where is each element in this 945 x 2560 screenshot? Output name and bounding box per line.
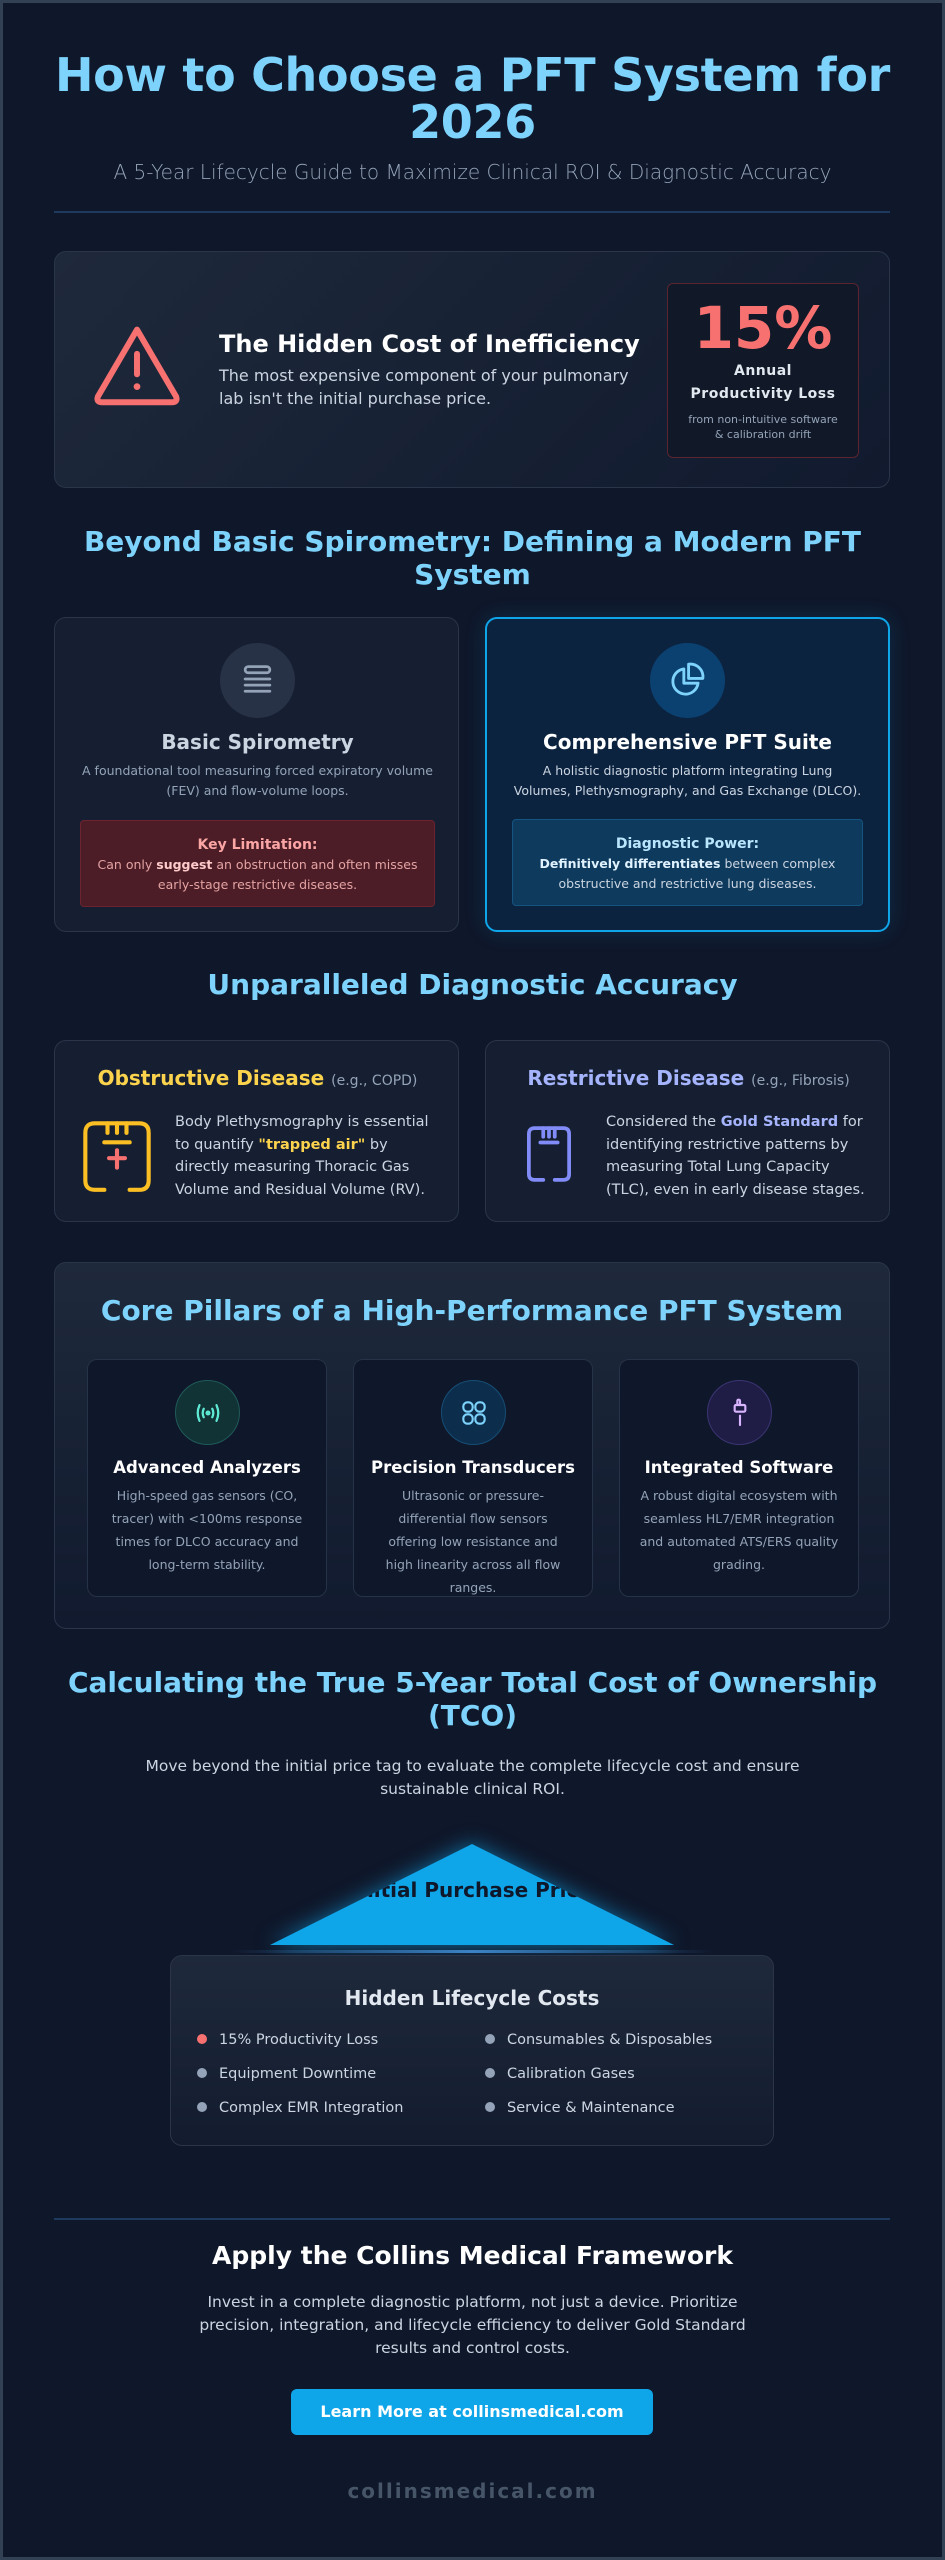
heading: Restrictive Disease (e.g., Fibrosis) <box>527 1066 850 1090</box>
box: hidden lifecycle costs: Hidden Lifecycle Costs <box>345 1986 599 2010</box>
desc: A holistic diagnostic platform integrating Lung <box>543 763 832 778</box>
panel: restrictive <box>485 1040 890 1222</box>
card: analyzers <box>87 1359 327 1597</box>
box: hidden lifecycle costs: Equipment Downtime <box>219 2066 376 2082</box>
icon: warning <box>94 326 180 406</box>
title: Integrated Software <box>645 1458 833 1477</box>
box: hidden lifecycle costs: Complex EMR Integration <box>219 2100 403 2116</box>
card: transducers <box>353 1359 593 1597</box>
stat box: 15% <box>694 294 832 362</box>
icon: device <box>527 1126 571 1182</box>
button: Learn More at collinsmedical.com <box>320 2402 624 2421</box>
icon: grid <box>441 1380 506 1445</box>
subtitle: A 5-Year Lifecycle Guide to Maximize Clinical ROI & Diagnostic Accuracy <box>114 160 831 184</box>
panel: basic spirometry <box>54 617 459 932</box>
callout: limitation: Key Limitation: <box>197 837 318 853</box>
stat box: & calibration drift <box>715 428 811 441</box>
icon: list <box>220 643 295 718</box>
icon: pie <box>650 643 725 718</box>
stat box: Annual <box>734 363 792 379</box>
icon: signal <box>175 1380 240 1445</box>
title: Basic Spirometry <box>161 730 354 754</box>
text: TCO intro: Move beyond the initial price tag to evaluate the complete lifecycle cost and ensure sustainable clinical ROI. <box>145 1757 800 1798</box>
callout: diagnostic power: Diagnostic Power: <box>616 836 759 852</box>
heading: accuracy: Unparalleled Diagnostic Accuracy <box>207 968 738 1001</box>
panel: comprehensive suite <box>485 617 890 932</box>
callout: diagnostic power: obstructive and restrictive lung diseases. <box>559 876 816 891</box>
triangle: initial purchase price: Initial Purchase Price <box>352 1878 592 1902</box>
box: hidden lifecycle costs: Consumables & Disposables <box>507 2032 712 2048</box>
button <box>291 2389 653 2435</box>
callout: diagnostic power: Definitively differentiates between complex <box>540 856 835 871</box>
heading: Core Pillars of a High-Performance PFT System <box>101 1294 843 1327</box>
box: hidden lifecycle costs <box>170 1955 774 2146</box>
callout: limitation <box>80 820 435 907</box>
stat box <box>667 283 859 458</box>
desc: Volumes, Plethysmography, and Gas Exchange (DLCO). <box>514 783 861 798</box>
title: Comprehensive PFT Suite <box>543 730 832 754</box>
text: Ultrasonic or pressure-differential flow sensors offering low resistance and high linearity across all flow ranges. <box>386 1488 560 1595</box>
title: Precision Transducers <box>371 1458 575 1477</box>
callout: diagnostic power <box>512 819 863 906</box>
panel: core pillars <box>54 1262 890 1629</box>
chart: cost iceberg <box>170 1834 774 2146</box>
callout: limitation: Can only suggest an obstruction and often misses <box>98 857 417 872</box>
panel: hidden cost <box>54 251 890 488</box>
title: How to Choose a PFT System for 2026 <box>55 48 890 149</box>
desc <box>514 763 861 798</box>
heading: apply framework: Apply the Collins Medical Framework <box>212 2241 733 2270</box>
text: Considered the Gold Standard for identifying restrictive patterns by measuring Total Lung Capacity (TLC), even in early disease stages. <box>606 1114 865 1198</box>
desc: A foundational tool measuring forced expiratory volume (FEV) and flow-volume loops. <box>82 763 433 798</box>
text: Body Plethysmography is essential to quantify "trapped air" by directly measuring Thoracic Gas Volume and Residual Volume (RV). <box>175 1114 429 1198</box>
heading: beyond spirometry: Beyond Basic Spirometry: Defining a Modern PFT System <box>84 525 861 591</box>
icon: plug <box>707 1380 772 1445</box>
footer: collinsmedical.com <box>347 2479 598 2503</box>
icon: lung box <box>83 1121 151 1192</box>
card: software <box>619 1359 859 1597</box>
text: High-speed gas sensors (CO, tracer) with <100ms response times for DLCO accuracy and long-term stability. <box>112 1488 302 1572</box>
heading: Obstructive Disease (e.g., COPD) <box>98 1066 417 1090</box>
heading: TCO: Calculating the True 5-Year Total Cost of Ownership (TCO) <box>68 1666 877 1732</box>
panel: obstructive <box>54 1040 459 1222</box>
stat box: Productivity Loss <box>691 386 835 402</box>
callout: limitation: early-stage restrictive diseases. <box>158 877 357 892</box>
text: conclusion: Invest in a complete diagnostic platform, not just a device. Prioritize precision, integration, and lifecycle efficiency to deliver Gold Standard results and control costs. <box>199 2293 746 2357</box>
stat box: from non-intuitive software <box>688 413 838 426</box>
text: A robust digital ecosystem with seamless HL7/EMR integration and automated ATS/ERS quality grading. <box>640 1488 838 1572</box>
box: hidden lifecycle costs: Calibration Gases <box>507 2066 635 2082</box>
heading: The Hidden Cost of Inefficiency <box>219 330 640 358</box>
box: hidden lifecycle costs: 15% Productivity Loss <box>219 2032 378 2048</box>
title: Advanced Analyzers <box>113 1458 301 1477</box>
text: The most expensive component of your pulmonary lab isn't the initial purchase price. <box>219 366 629 408</box>
box: hidden lifecycle costs: Service & Maintenance <box>507 2100 674 2116</box>
